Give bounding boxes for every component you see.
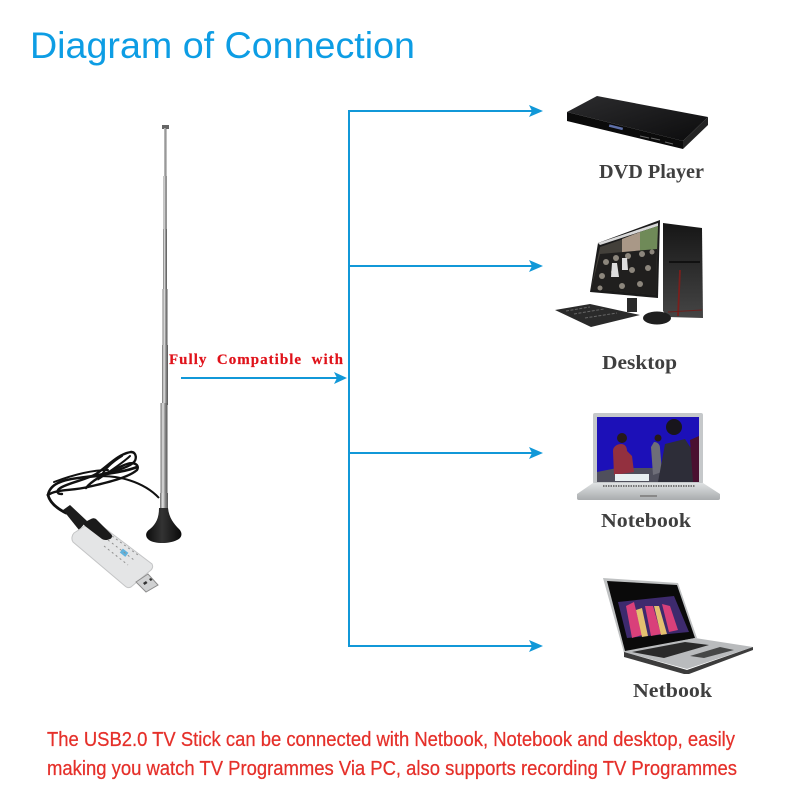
label: Netbook: Netbook [633, 680, 713, 702]
cable boot [63, 505, 87, 530]
caption [47, 729, 737, 780]
label: Desktop: Desktop [602, 352, 677, 374]
stick logo [120, 549, 128, 557]
icon: desktop computer [555, 220, 703, 327]
cable loops [48, 452, 138, 513]
stick body [72, 521, 153, 588]
compatibility label: Fully Compatible with [169, 352, 344, 368]
title: Diagram of Connection [30, 25, 415, 66]
mouse [643, 312, 671, 324]
caption: The USB2.0 TV Stick can be connected with Netbook, Notebook and desktop, easily [47, 729, 735, 751]
label: DVD Player: DVD Player [599, 161, 704, 183]
icon: DVD player [567, 96, 708, 149]
stand [627, 298, 637, 312]
USB TV stick and cable [48, 452, 159, 592]
base [624, 638, 753, 669]
keyboard [555, 304, 640, 327]
monitor [590, 220, 660, 298]
arrow to netbook [348, 640, 543, 652]
arrow to DVD player [348, 105, 543, 117]
stick black grip [84, 518, 112, 540]
caption: making you watch TV Programmes Via PC, also supports recording TV Programmes [47, 758, 737, 780]
arrow to notebook [348, 447, 543, 459]
splitter trunk with four arrows [348, 105, 543, 652]
icon: notebook [577, 413, 720, 500]
antenna cable [90, 476, 159, 498]
USB plug [136, 574, 158, 592]
label: Notebook: Notebook [601, 510, 692, 532]
base [577, 483, 720, 500]
crowd in the screen [598, 250, 654, 290]
icon: netbook [603, 578, 753, 674]
antenna with magnetic base [146, 125, 181, 543]
arrow to desktop [348, 260, 543, 272]
tower [663, 223, 703, 318]
screen people [613, 444, 634, 475]
connector: stick to splitter [181, 372, 347, 384]
